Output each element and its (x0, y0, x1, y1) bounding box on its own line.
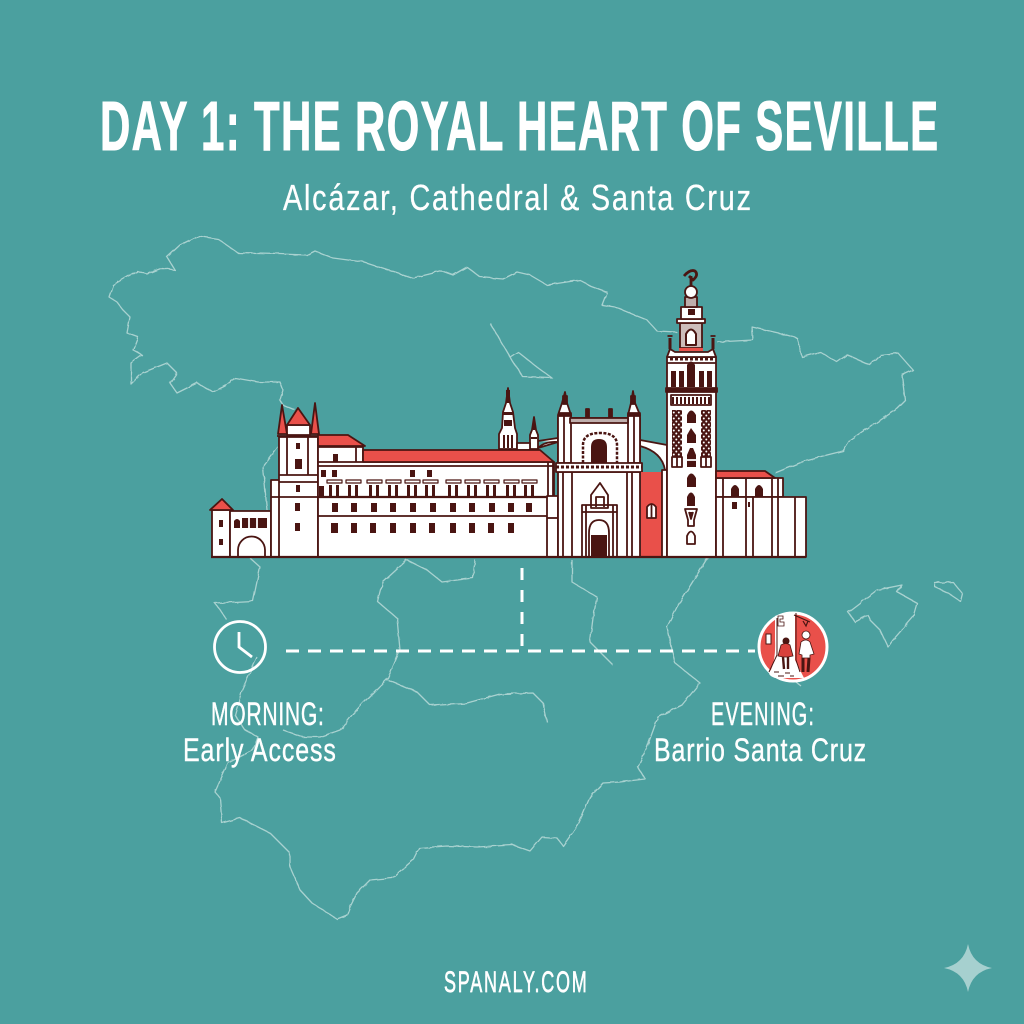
figure in white shirt (799, 631, 814, 672)
cathedral spires behind (499, 388, 558, 450)
red side panel with window (641, 470, 667, 557)
gatehouse (210, 480, 280, 557)
Giralda bell tower (666, 271, 717, 557)
flying buttress (640, 440, 667, 470)
label: evening: EVENING: (711, 696, 814, 732)
right wing (716, 471, 806, 557)
palace balcony lintels (327, 480, 537, 483)
main tower (271, 403, 320, 557)
ground line (211, 556, 806, 558)
icon: evening street scene (759, 612, 827, 681)
palace balcony columns (319, 485, 534, 496)
label: evening (654, 696, 866, 769)
long palace wing (318, 450, 558, 557)
connector: horizontal dashed line (286, 650, 755, 652)
title: DAY 1: THE ROYAL HEART OF SEVILLE (100, 88, 938, 166)
palace window rows (331, 503, 532, 533)
icon: clock (214, 622, 266, 672)
footer website: SPANALY.COM (444, 967, 587, 999)
upper wing and red roof (318, 435, 365, 463)
label: morning: Early Access (183, 733, 336, 769)
label: morning: MORNING: (211, 695, 324, 732)
label: evening: Barrio Santa Cruz (654, 733, 866, 769)
illustration: Alcázar and Cathedral with Giralda (210, 271, 806, 557)
map of Spain outline (109, 236, 962, 919)
label: morning (183, 695, 336, 769)
palace small windows (321, 470, 432, 477)
subtitle: Alcázar, Cathedral & Santa Cruz (283, 177, 751, 218)
icon: sparkle (944, 944, 992, 992)
connector: vertical dashed line (520, 568, 524, 646)
cathedral central facade (556, 391, 642, 557)
figure in red coat (778, 638, 793, 669)
